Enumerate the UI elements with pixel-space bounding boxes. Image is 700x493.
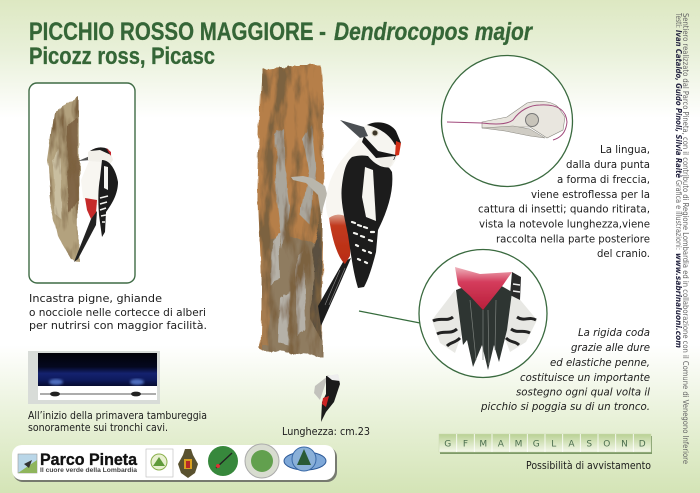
circle: skull with tongue	[442, 56, 572, 186]
text block: tongue: viene estroflessa per la	[531, 189, 650, 201]
logo: sistema parchi	[146, 449, 173, 477]
text block: tail: grazie alle dure	[571, 342, 650, 354]
logo: planet	[284, 447, 326, 471]
text block: tongue: cattura di insetti; quando ritirata,	[478, 204, 650, 216]
head	[358, 122, 401, 167]
text block: tongue: vista la notevole lunghezza,viene	[479, 218, 650, 230]
length label: Lunghezza: cm.23	[282, 426, 370, 438]
vertical credits: www.sabrinaluoni.com	[674, 253, 683, 348]
text block: tail	[480, 327, 650, 413]
sighting months calendar	[439, 434, 652, 454]
text block: tail: sostegno ogni qual volta il	[516, 386, 650, 398]
skull	[482, 101, 565, 138]
text block: tongue	[478, 144, 650, 260]
chart: spectrogram	[28, 351, 160, 404]
park tagline: Il cuore verde della Lombardia	[40, 467, 137, 474]
text block: tail: ed elastiche penne,	[550, 357, 650, 369]
sighting months calendar: O	[603, 440, 610, 450]
barred outer feathers	[432, 272, 537, 353]
eye	[372, 130, 378, 136]
neck patch	[376, 156, 395, 168]
text block: feeding: per nutrirsi con maggior facilità.	[29, 320, 207, 332]
main trunk	[258, 65, 324, 356]
lower jaw	[482, 126, 545, 138]
sighting months calendar: L	[551, 440, 556, 450]
text block: feeding: Incastra pigne, ghiande	[29, 293, 162, 305]
subtitle: dialect names: Picozz ross, Picasc	[29, 43, 215, 70]
text block: feeding	[29, 293, 207, 332]
callout connector line	[359, 311, 420, 323]
icon: park logo	[18, 454, 37, 473]
title: Dendrocopos major	[334, 18, 533, 46]
circle: tail detail	[419, 250, 547, 378]
red nape	[395, 141, 401, 156]
tongue	[447, 105, 567, 140]
text block: feeding: o nocciole nelle cortecce di alberi	[29, 307, 206, 319]
logo: coat of arms	[178, 449, 198, 478]
red undertail coverts	[455, 267, 512, 310]
vertical credits: Ivan Cataldo, Guido Pinoli, Silvia Raitè	[674, 30, 683, 178]
text block: drumming: All’inizio della primavera tambureggia	[28, 410, 207, 422]
text block: tongue: dalla dura punta	[566, 159, 650, 171]
vertical credits: Grafica e illustrazioni:	[674, 180, 683, 250]
wing spots	[352, 222, 374, 263]
tail	[318, 258, 351, 326]
sighting months calendar: M	[479, 440, 487, 450]
logo: GEV	[245, 444, 279, 478]
sighting months calendar: G	[444, 440, 451, 450]
beak	[340, 120, 368, 138]
main woodpecker	[291, 120, 401, 326]
sighting months calendar: A	[498, 440, 505, 450]
title: PICCHIO ROSSO MAGGIORE -	[29, 18, 326, 46]
text block: tongue: a forma di freccia,	[557, 174, 650, 186]
text block: drumming	[28, 410, 207, 434]
vertical credits: Testi:	[674, 12, 683, 28]
text block: tongue: del cranio.	[597, 248, 650, 260]
icon: small silhouette for size	[314, 374, 340, 422]
logo: alpini	[208, 446, 238, 476]
red undertail	[329, 215, 350, 264]
text block: tail: costituisce un importante	[520, 372, 650, 384]
sighting months calendar: S	[586, 440, 592, 450]
scapular patch	[362, 167, 376, 221]
sighting months calendar: M	[515, 440, 522, 450]
foot	[291, 176, 327, 215]
moustache stripe	[362, 136, 396, 160]
back and wing	[341, 155, 392, 288]
park name: Parco Pineta	[40, 450, 138, 469]
text block: tongue: raccolta nella parte posteriore	[496, 234, 650, 246]
text block: tail: La rigida coda	[578, 327, 650, 339]
eye socket	[526, 114, 538, 126]
dark central feathers	[456, 284, 512, 370]
small woodpecker	[74, 147, 118, 262]
panel: feeding illustration card	[29, 83, 135, 283]
belly	[326, 138, 368, 220]
calendar caption: Possibilità di avvistamento	[526, 460, 651, 472]
sighting months calendar: N	[621, 440, 628, 450]
logo bar	[12, 444, 337, 482]
text block: tongue: La lingua,	[600, 144, 650, 156]
sighting months calendar: D	[639, 440, 646, 450]
sighting months calendar: F	[463, 440, 468, 450]
sighting months calendar: A	[568, 440, 575, 450]
text block: tail: picchio si poggia su di un tronco.	[480, 401, 650, 413]
text block: drumming: sonoramente sui tronchi cavi.	[28, 422, 168, 434]
black cap	[367, 122, 401, 145]
vertical credits	[674, 12, 690, 464]
sighting months calendar: G	[533, 440, 540, 450]
small trunk	[47, 97, 80, 262]
